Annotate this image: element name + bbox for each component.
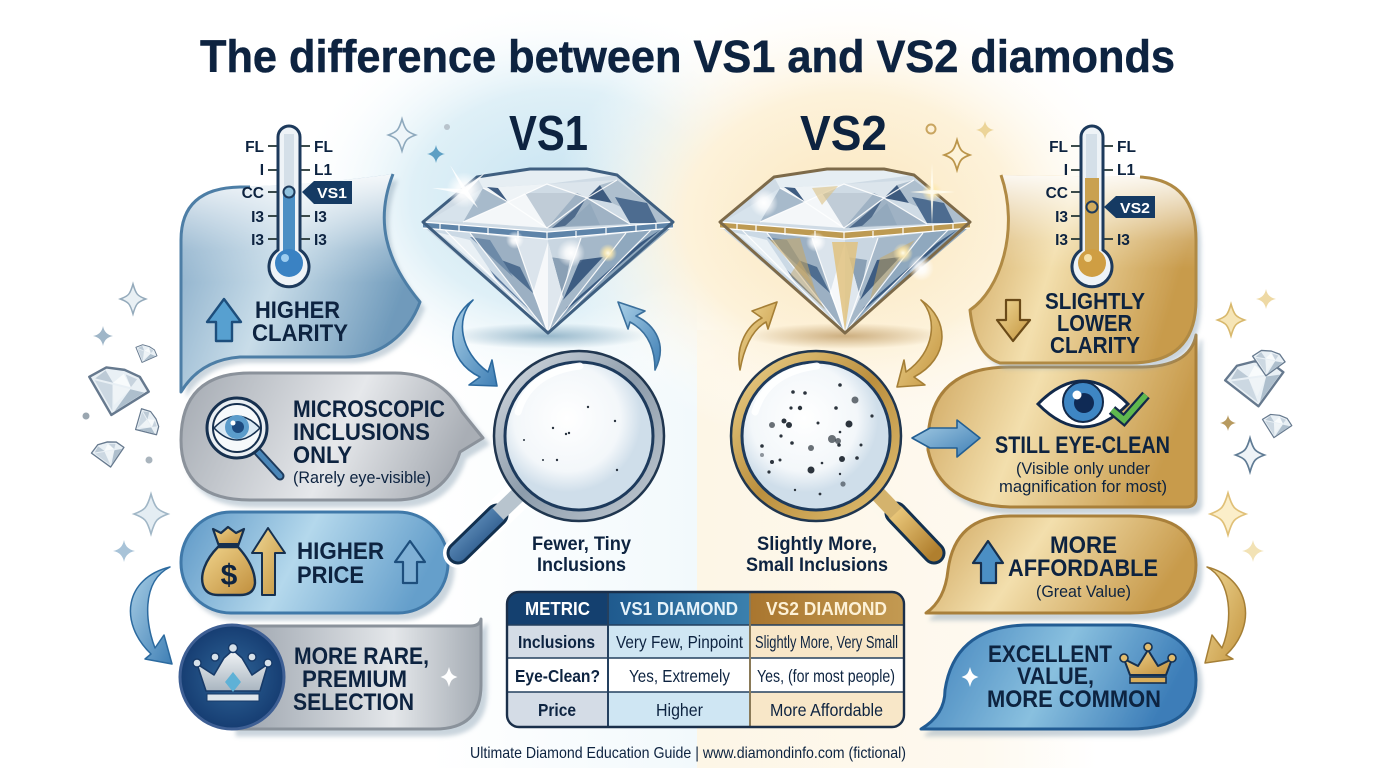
- panel: excellent value: [921, 625, 1196, 729]
- arrow: price to rarity: [130, 567, 172, 664]
- icon: VS1 thermometer: I: [260, 162, 264, 179]
- label: more rare premium selection: SELECTION: [293, 689, 414, 716]
- label: more affordable: [1008, 532, 1158, 582]
- icon: VS1 thermometer: I3: [251, 209, 264, 226]
- label: slightly lower clarity: [1045, 288, 1145, 358]
- icon: VS1 thermometer: I3: [314, 209, 327, 226]
- table row: eye-clean: Eye-Clean?: [515, 666, 600, 686]
- label: more affordable: MORE: [1050, 532, 1117, 559]
- table row: inclusions: Inclusions: [518, 632, 595, 652]
- magnifier: VS1: [458, 351, 664, 553]
- caption: slightly more small inclusions: Small Inclusions: [746, 555, 888, 576]
- note: visible only under magnification: [999, 459, 1167, 496]
- label: higher price: HIGHER: [297, 538, 384, 565]
- label: microscopic inclusions only: [293, 396, 445, 469]
- icon: VS2 thermometer: L1: [1117, 162, 1135, 179]
- label: slightly lower clarity: CLARITY: [1050, 332, 1140, 358]
- icon: VS2 thermometer: FL: [1049, 139, 1068, 156]
- table row: eye-clean: Yes, Extremely: [629, 666, 730, 686]
- table row: price: Price: [538, 700, 576, 720]
- icon: blue arrow: [912, 420, 980, 457]
- comparison table: [507, 592, 904, 727]
- note: visible only under magnification: (Visible only under: [1016, 459, 1150, 478]
- icon: gold crown: [1120, 643, 1176, 683]
- icon: crown badge: [180, 625, 284, 729]
- icon: VS1 thermometer: L1: [314, 162, 332, 179]
- caption: slightly more small inclusions: [746, 534, 888, 576]
- table row: inclusions: Slightly More, Very Small: [755, 632, 898, 652]
- icon: outline up arrow: [395, 541, 425, 583]
- note: rarely eye-visible: (Rarely eye-visible): [293, 468, 431, 487]
- arrow: affordable to value: [1205, 567, 1246, 663]
- label: more rare premium selection: MORE RARE,: [294, 643, 429, 670]
- inclusions dots: [760, 383, 874, 495]
- table row: price: More Affordable: [770, 700, 883, 720]
- icon: VS2 thermometer: [1046, 126, 1155, 287]
- label: higher clarity: CLARITY: [252, 320, 348, 347]
- arrow: VS2 magnifier to diamond: [739, 302, 777, 370]
- icon: blue up arrow: [973, 541, 1003, 583]
- icon: up arrow: [207, 299, 241, 341]
- label: excellent value more common: [987, 641, 1161, 713]
- label: excellent value more common: EXCELLENT: [988, 641, 1112, 668]
- inclusions dots: [523, 406, 618, 471]
- caption: fewer tiny inclusions: [532, 534, 631, 576]
- panel: more rare: [180, 619, 481, 729]
- caption: slightly more small inclusions: Slightly More,: [757, 534, 877, 555]
- icon: sparkle: [440, 667, 458, 687]
- panel: higher price: [181, 512, 448, 613]
- label: excellent value more common: MORE COMMON: [987, 686, 1161, 713]
- icon: VS1 thermometer: VS1: [317, 185, 347, 202]
- panel: slightly lower clarity: [970, 175, 1196, 363]
- label: more rare premium selection: [293, 643, 429, 716]
- caption: fewer tiny inclusions: Inclusions: [537, 555, 626, 576]
- icon: money bag: $: [221, 559, 238, 592]
- label: excellent value more common: VALUE,: [1017, 663, 1094, 690]
- title: The difference between VS1 and VS2 diamonds: [200, 31, 1175, 82]
- icon: VS1 thermometer: I3: [314, 232, 327, 249]
- panel: microscopic inclusions: [181, 373, 483, 500]
- table row: price: [538, 700, 883, 720]
- note: visible only under magnification: magnification for most): [999, 477, 1167, 496]
- label: higher clarity: [252, 297, 348, 347]
- icon: VS1 thermometer: I3: [251, 232, 264, 249]
- arrow: diamond to VS2 magnifier: [897, 300, 942, 387]
- panel: still eye-clean: [912, 335, 1196, 507]
- table row: eye-clean: [515, 666, 895, 686]
- decoration: left sparkles and gems: [82, 119, 450, 562]
- icon: VS2 thermometer: CC: [1046, 185, 1068, 202]
- icon: VS2 thermometer: I3: [1117, 232, 1130, 249]
- table header: [525, 599, 887, 619]
- icon: eye with check: [1038, 381, 1146, 427]
- diamond: VS1: [423, 165, 673, 349]
- note: great value: (Great Value): [1036, 582, 1131, 601]
- table row: price: Higher: [656, 700, 703, 720]
- label: microscopic inclusions only: MICROSCOPIC: [293, 396, 445, 423]
- arrow: diamond to VS1 magnifier: [453, 300, 497, 386]
- label: microscopic inclusions only: ONLY: [293, 442, 352, 469]
- label: more rare premium selection: PREMIUM: [302, 666, 407, 693]
- icon: eye magnifier: [207, 398, 280, 476]
- panel: higher clarity: [181, 174, 420, 392]
- arrow: VS1 magnifier to diamond: [618, 302, 660, 370]
- icon: gold up arrow: [252, 528, 285, 595]
- panel: more affordable: [926, 516, 1196, 613]
- magnifier: VS2: [731, 351, 934, 553]
- label: higher price: [297, 538, 384, 589]
- icon: VS1 thermometer: FL: [245, 139, 264, 156]
- label: slightly lower clarity: SLIGHTLY: [1045, 288, 1145, 314]
- label: higher clarity: HIGHER: [255, 297, 340, 324]
- heading: VS2: VS2: [800, 107, 887, 161]
- heading: VS1: VS1: [509, 107, 588, 161]
- icon: money bag: [202, 527, 255, 595]
- table row: eye-clean: Yes, (for most people): [757, 666, 895, 686]
- table header: VS2 DIAMOND: [766, 599, 887, 619]
- label: more affordable: AFFORDABLE: [1008, 555, 1158, 582]
- caption: fewer tiny inclusions: Fewer, Tiny: [532, 534, 631, 555]
- icon: VS1 thermometer: FL: [314, 139, 333, 156]
- icon: VS1 thermometer: [242, 126, 352, 287]
- icon: VS2 thermometer: I3: [1055, 232, 1068, 249]
- icon: sparkle: [962, 667, 978, 687]
- icon: down arrow: [997, 300, 1030, 341]
- table row: inclusions: Very Few, Pinpoint: [616, 632, 743, 652]
- table header: VS1 DIAMOND: [620, 599, 738, 619]
- decoration: right sparkles and gems: [926, 121, 1293, 562]
- icon: VS2 thermometer: I: [1064, 162, 1068, 179]
- label: slightly lower clarity: LOWER: [1057, 310, 1132, 336]
- label: microscopic inclusions only: INCLUSIONS: [293, 419, 430, 446]
- table header: METRIC: [525, 599, 590, 619]
- icon: VS2 thermometer: FL: [1117, 139, 1136, 156]
- icon: VS1 thermometer: CC: [242, 185, 264, 202]
- label: higher price: PRICE: [297, 562, 364, 589]
- icon: VS2 thermometer: VS2: [1120, 200, 1150, 217]
- label: still eye-clean: STILL EYE-CLEAN: [995, 432, 1170, 459]
- diamond: VS2: [720, 163, 970, 349]
- table row: inclusions: [518, 632, 898, 652]
- footer: Ultimate Diamond Education Guide | www.diamondinfo.com (fictional): [470, 745, 906, 762]
- icon: VS2 thermometer: I3: [1055, 209, 1068, 226]
